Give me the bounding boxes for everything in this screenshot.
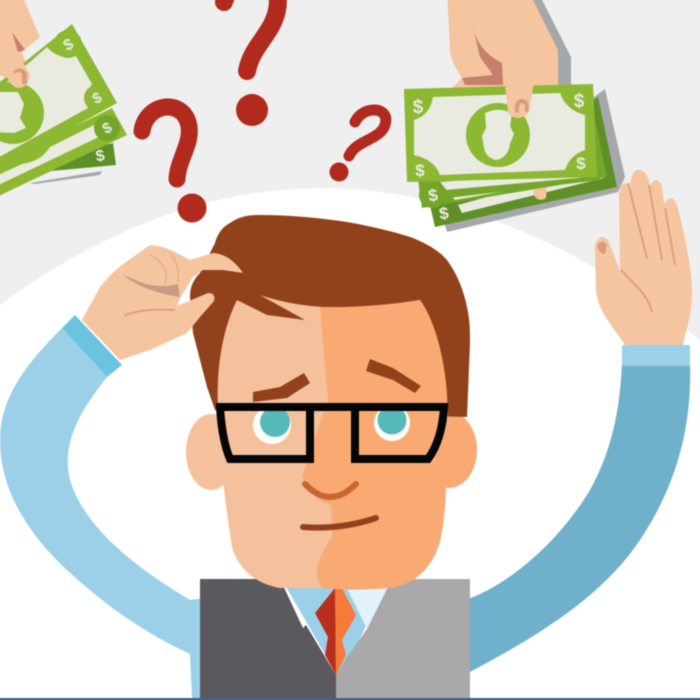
right arm <box>465 170 692 672</box>
left hand scratching head <box>82 245 243 360</box>
necktie <box>315 580 356 675</box>
middle note <box>418 95 607 208</box>
money stack: left: $ <box>61 36 77 55</box>
money stack and hand: right: $ <box>576 154 586 173</box>
ears <box>186 414 236 490</box>
left arm <box>0 315 205 698</box>
vest <box>200 579 470 698</box>
top question mark <box>224 0 278 126</box>
left question mark <box>142 107 206 222</box>
right eyebrow <box>366 359 421 393</box>
small question mark <box>330 110 386 182</box>
raised right hand <box>595 170 692 345</box>
money stack and hand: right: $ <box>574 91 585 112</box>
face <box>216 295 448 590</box>
top right hand <box>447 0 558 90</box>
money stack: left: $ <box>90 89 105 108</box>
left eye <box>253 406 291 444</box>
money stack and hand: right <box>404 0 625 232</box>
money stack: left: $ <box>94 147 106 166</box>
back note <box>430 97 617 227</box>
money stack: left <box>0 0 127 200</box>
money stack and hand: right: $ <box>413 97 424 118</box>
money stack: left: $ <box>100 119 115 138</box>
man <box>0 170 692 698</box>
note shadow <box>444 89 625 232</box>
thumb over note <box>505 63 540 118</box>
hand shadow <box>528 0 571 90</box>
hair <box>190 215 470 417</box>
mouth <box>303 518 376 528</box>
left eyebrow <box>253 373 310 402</box>
money stack and hand: right: $ <box>415 161 425 180</box>
left cuff <box>62 315 122 377</box>
money stack and hand: right: $ <box>438 203 450 224</box>
shirt collar <box>282 580 392 680</box>
left hand holding money <box>0 0 40 88</box>
front note <box>404 84 597 182</box>
money stack and hand: right: $ <box>427 185 440 206</box>
right eye <box>374 405 410 441</box>
nose <box>305 484 356 497</box>
glasses <box>216 407 444 459</box>
right cuff <box>622 345 690 366</box>
